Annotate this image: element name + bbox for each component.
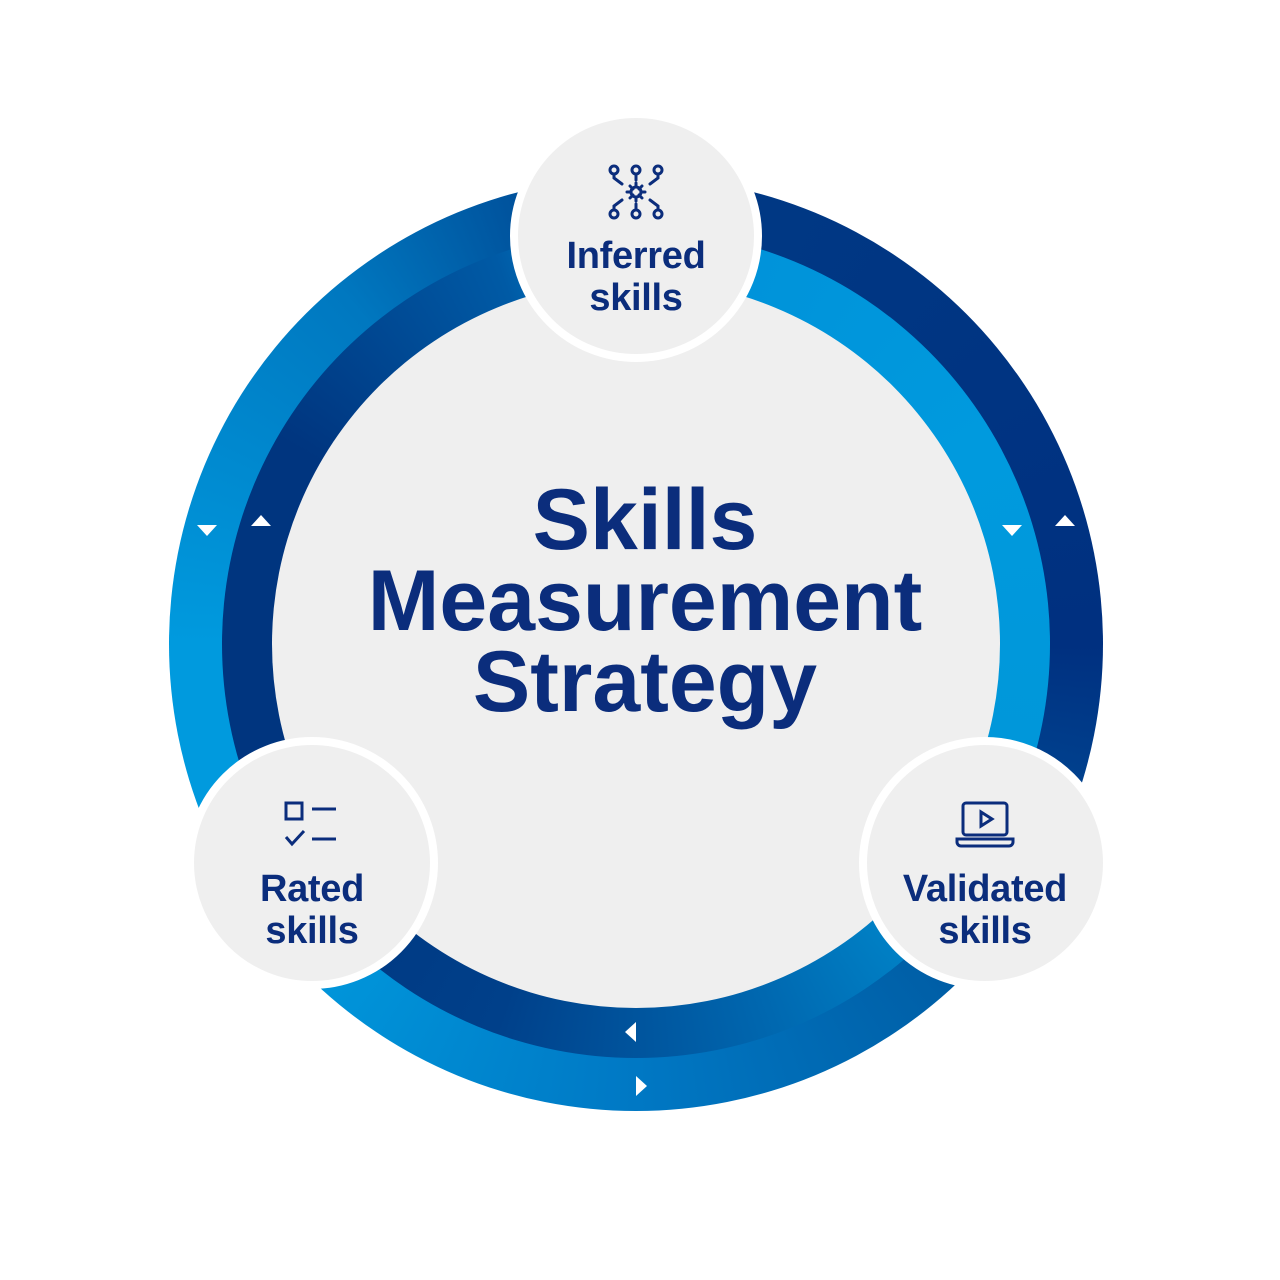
- circle: inferred skills: [510, 110, 762, 362]
- circle: rated skills: [186, 737, 438, 989]
- title: [368, 472, 922, 730]
- ring: outer band: [169, 177, 1103, 1111]
- circle: inferred skills: Inferred: [566, 235, 706, 277]
- icon: network gear: [608, 164, 664, 220]
- icon: laptop play: [956, 802, 1014, 848]
- title: Strategy: [473, 634, 817, 730]
- title: Skills: [533, 472, 757, 568]
- title: Measurement: [368, 553, 922, 649]
- icon: checklist: [284, 802, 336, 846]
- ring: inner band: [222, 230, 1050, 1058]
- circle: rated skills: Rated: [260, 868, 364, 910]
- circle: inferred skills: skills: [589, 277, 683, 319]
- circle: validated skills: Validated: [903, 868, 1067, 910]
- circle: validated skills: skills: [938, 910, 1032, 952]
- circle: rated skills: skills: [265, 910, 359, 952]
- circle: validated skills: [859, 737, 1111, 989]
- center circle: [272, 280, 1000, 1008]
